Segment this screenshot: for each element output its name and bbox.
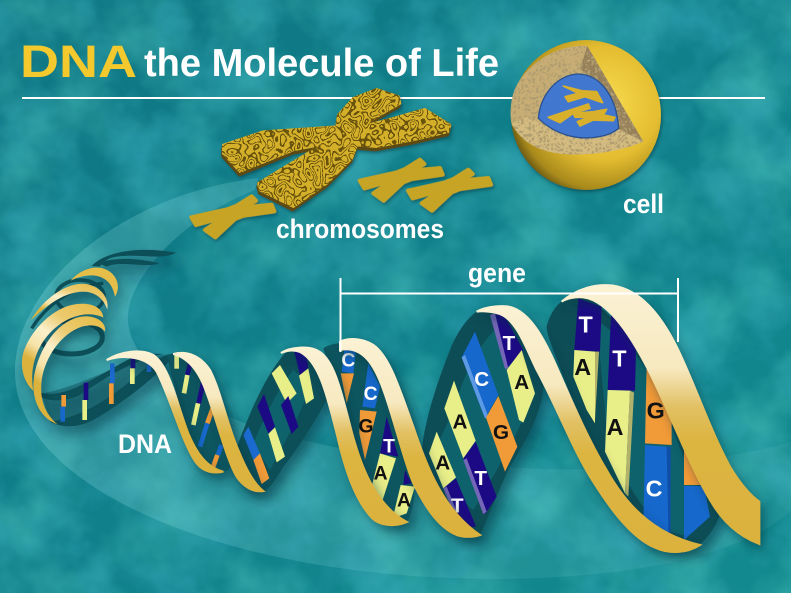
base letters: C <box>341 351 355 372</box>
base letters: A <box>453 410 468 433</box>
base letters: A <box>574 354 591 380</box>
title: DNA <box>20 36 137 87</box>
nucleus <box>538 74 619 138</box>
cell sphere <box>511 40 661 190</box>
base letters <box>341 311 665 518</box>
small rungs left section <box>63 351 314 484</box>
title: the Molecule of Life <box>144 42 499 85</box>
nucleus chromosomes <box>548 86 615 126</box>
base letters: T <box>383 437 395 458</box>
large chromosome <box>223 89 450 210</box>
label: gene: gene <box>468 258 526 288</box>
gene bracket <box>340 278 678 352</box>
label: DNA: DNA <box>118 429 172 459</box>
coil ribbons <box>22 268 118 424</box>
base letters: T <box>503 332 516 355</box>
title <box>20 36 499 87</box>
base letters: C <box>646 476 663 502</box>
label: cell: cell <box>623 189 664 219</box>
translucent swoosh behind DNA <box>15 178 791 579</box>
base letters: T <box>612 346 626 372</box>
base letters: A <box>514 371 529 394</box>
base letters: G <box>493 421 509 444</box>
cytoplasm floor <box>512 117 643 154</box>
right loops <box>323 295 721 547</box>
base letters: G <box>647 397 665 423</box>
base letters: C <box>474 368 489 391</box>
title rule <box>22 97 765 99</box>
base letters: A <box>607 414 624 440</box>
middle ribbons <box>281 348 407 525</box>
base letters: A <box>397 491 411 512</box>
coil back rings <box>32 250 176 354</box>
cytoplasm wall <box>511 46 643 154</box>
small chromosomes <box>191 160 491 237</box>
base letters: A <box>374 463 388 484</box>
gold helix front ribbons <box>22 268 759 552</box>
cell cutaway <box>511 40 661 190</box>
base letters: C <box>364 384 378 405</box>
base letters: T <box>474 467 487 490</box>
DNA back strands <box>32 250 721 547</box>
base letters: T <box>451 495 464 518</box>
base letters: T <box>579 311 593 337</box>
base letters: A <box>435 451 450 474</box>
label: chromosomes: chromosomes <box>276 214 444 244</box>
left ribbons <box>107 351 263 491</box>
shaded right wall <box>580 46 643 142</box>
base pair rungs gene section <box>341 298 710 543</box>
left double strand <box>41 345 347 492</box>
base letters: G <box>358 417 374 438</box>
gene section ribbons <box>340 285 759 552</box>
